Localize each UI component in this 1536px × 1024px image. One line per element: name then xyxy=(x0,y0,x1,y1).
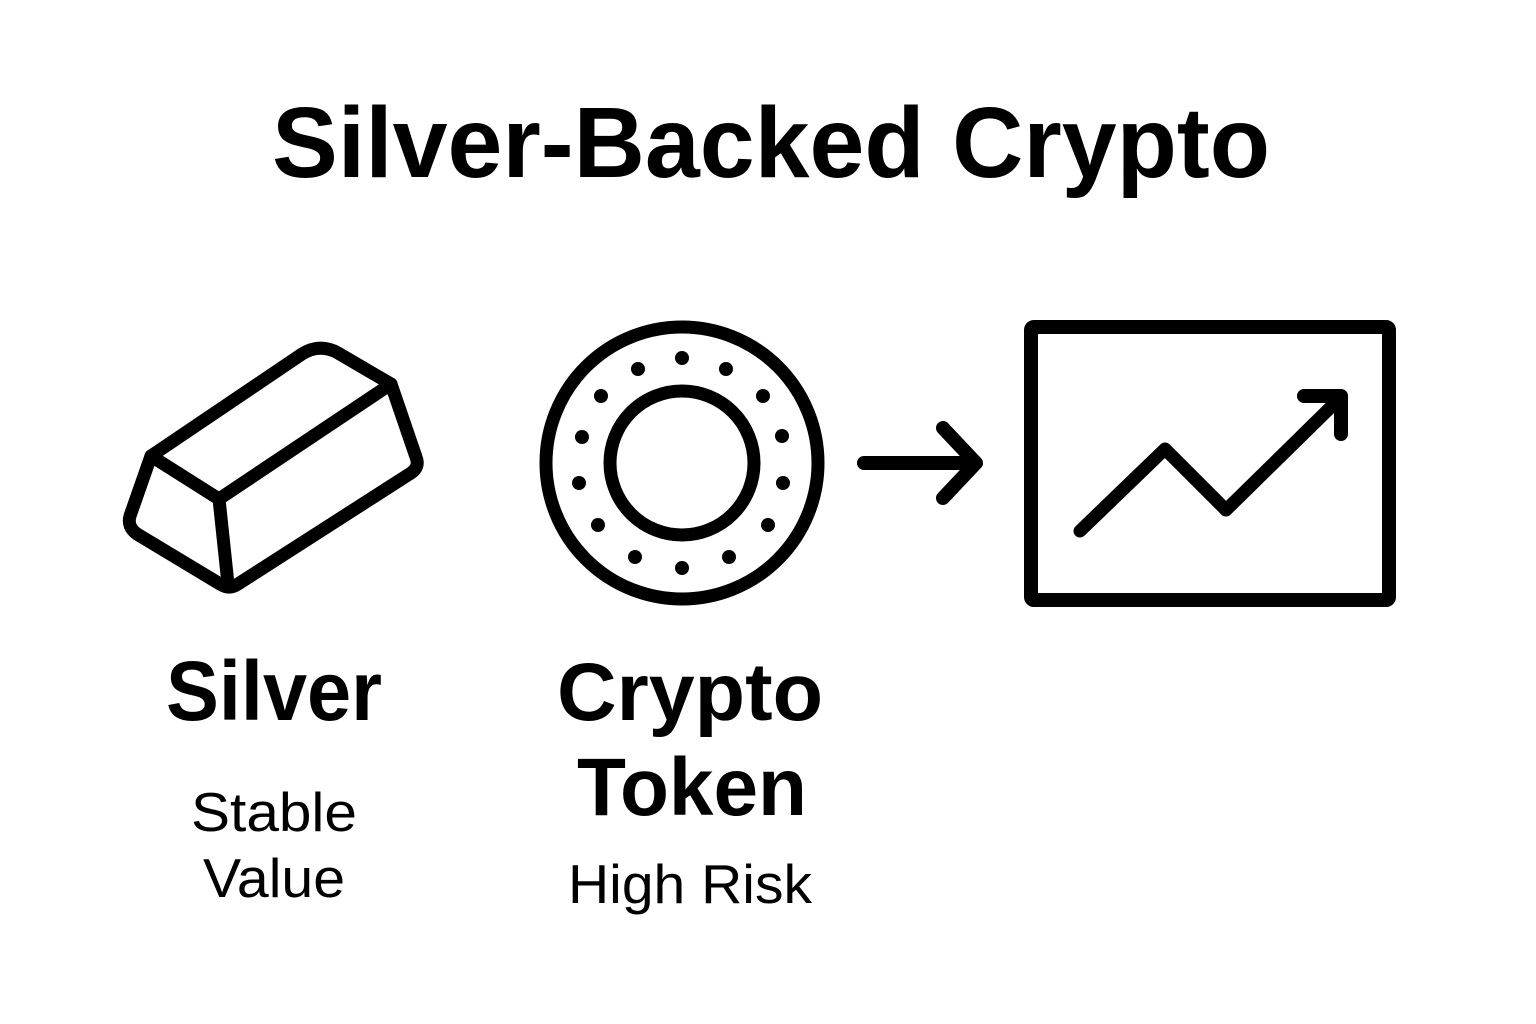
text: stable value: Stable xyxy=(191,781,357,843)
icon: silver bar xyxy=(129,348,417,587)
heading: silver: Silver xyxy=(166,644,382,738)
text: high risk: High Risk xyxy=(568,853,813,915)
heading: crypto token: Token xyxy=(577,742,807,833)
heading: crypto token: Crypto xyxy=(557,647,823,738)
icon: crypto token xyxy=(546,327,818,599)
text: stable value xyxy=(191,781,357,909)
icon: growth chart xyxy=(1031,327,1389,600)
arrow xyxy=(864,428,976,498)
title: Silver-Backed Crypto xyxy=(272,87,1270,199)
text: stable value: Value xyxy=(203,847,345,909)
heading: crypto token xyxy=(557,647,823,833)
